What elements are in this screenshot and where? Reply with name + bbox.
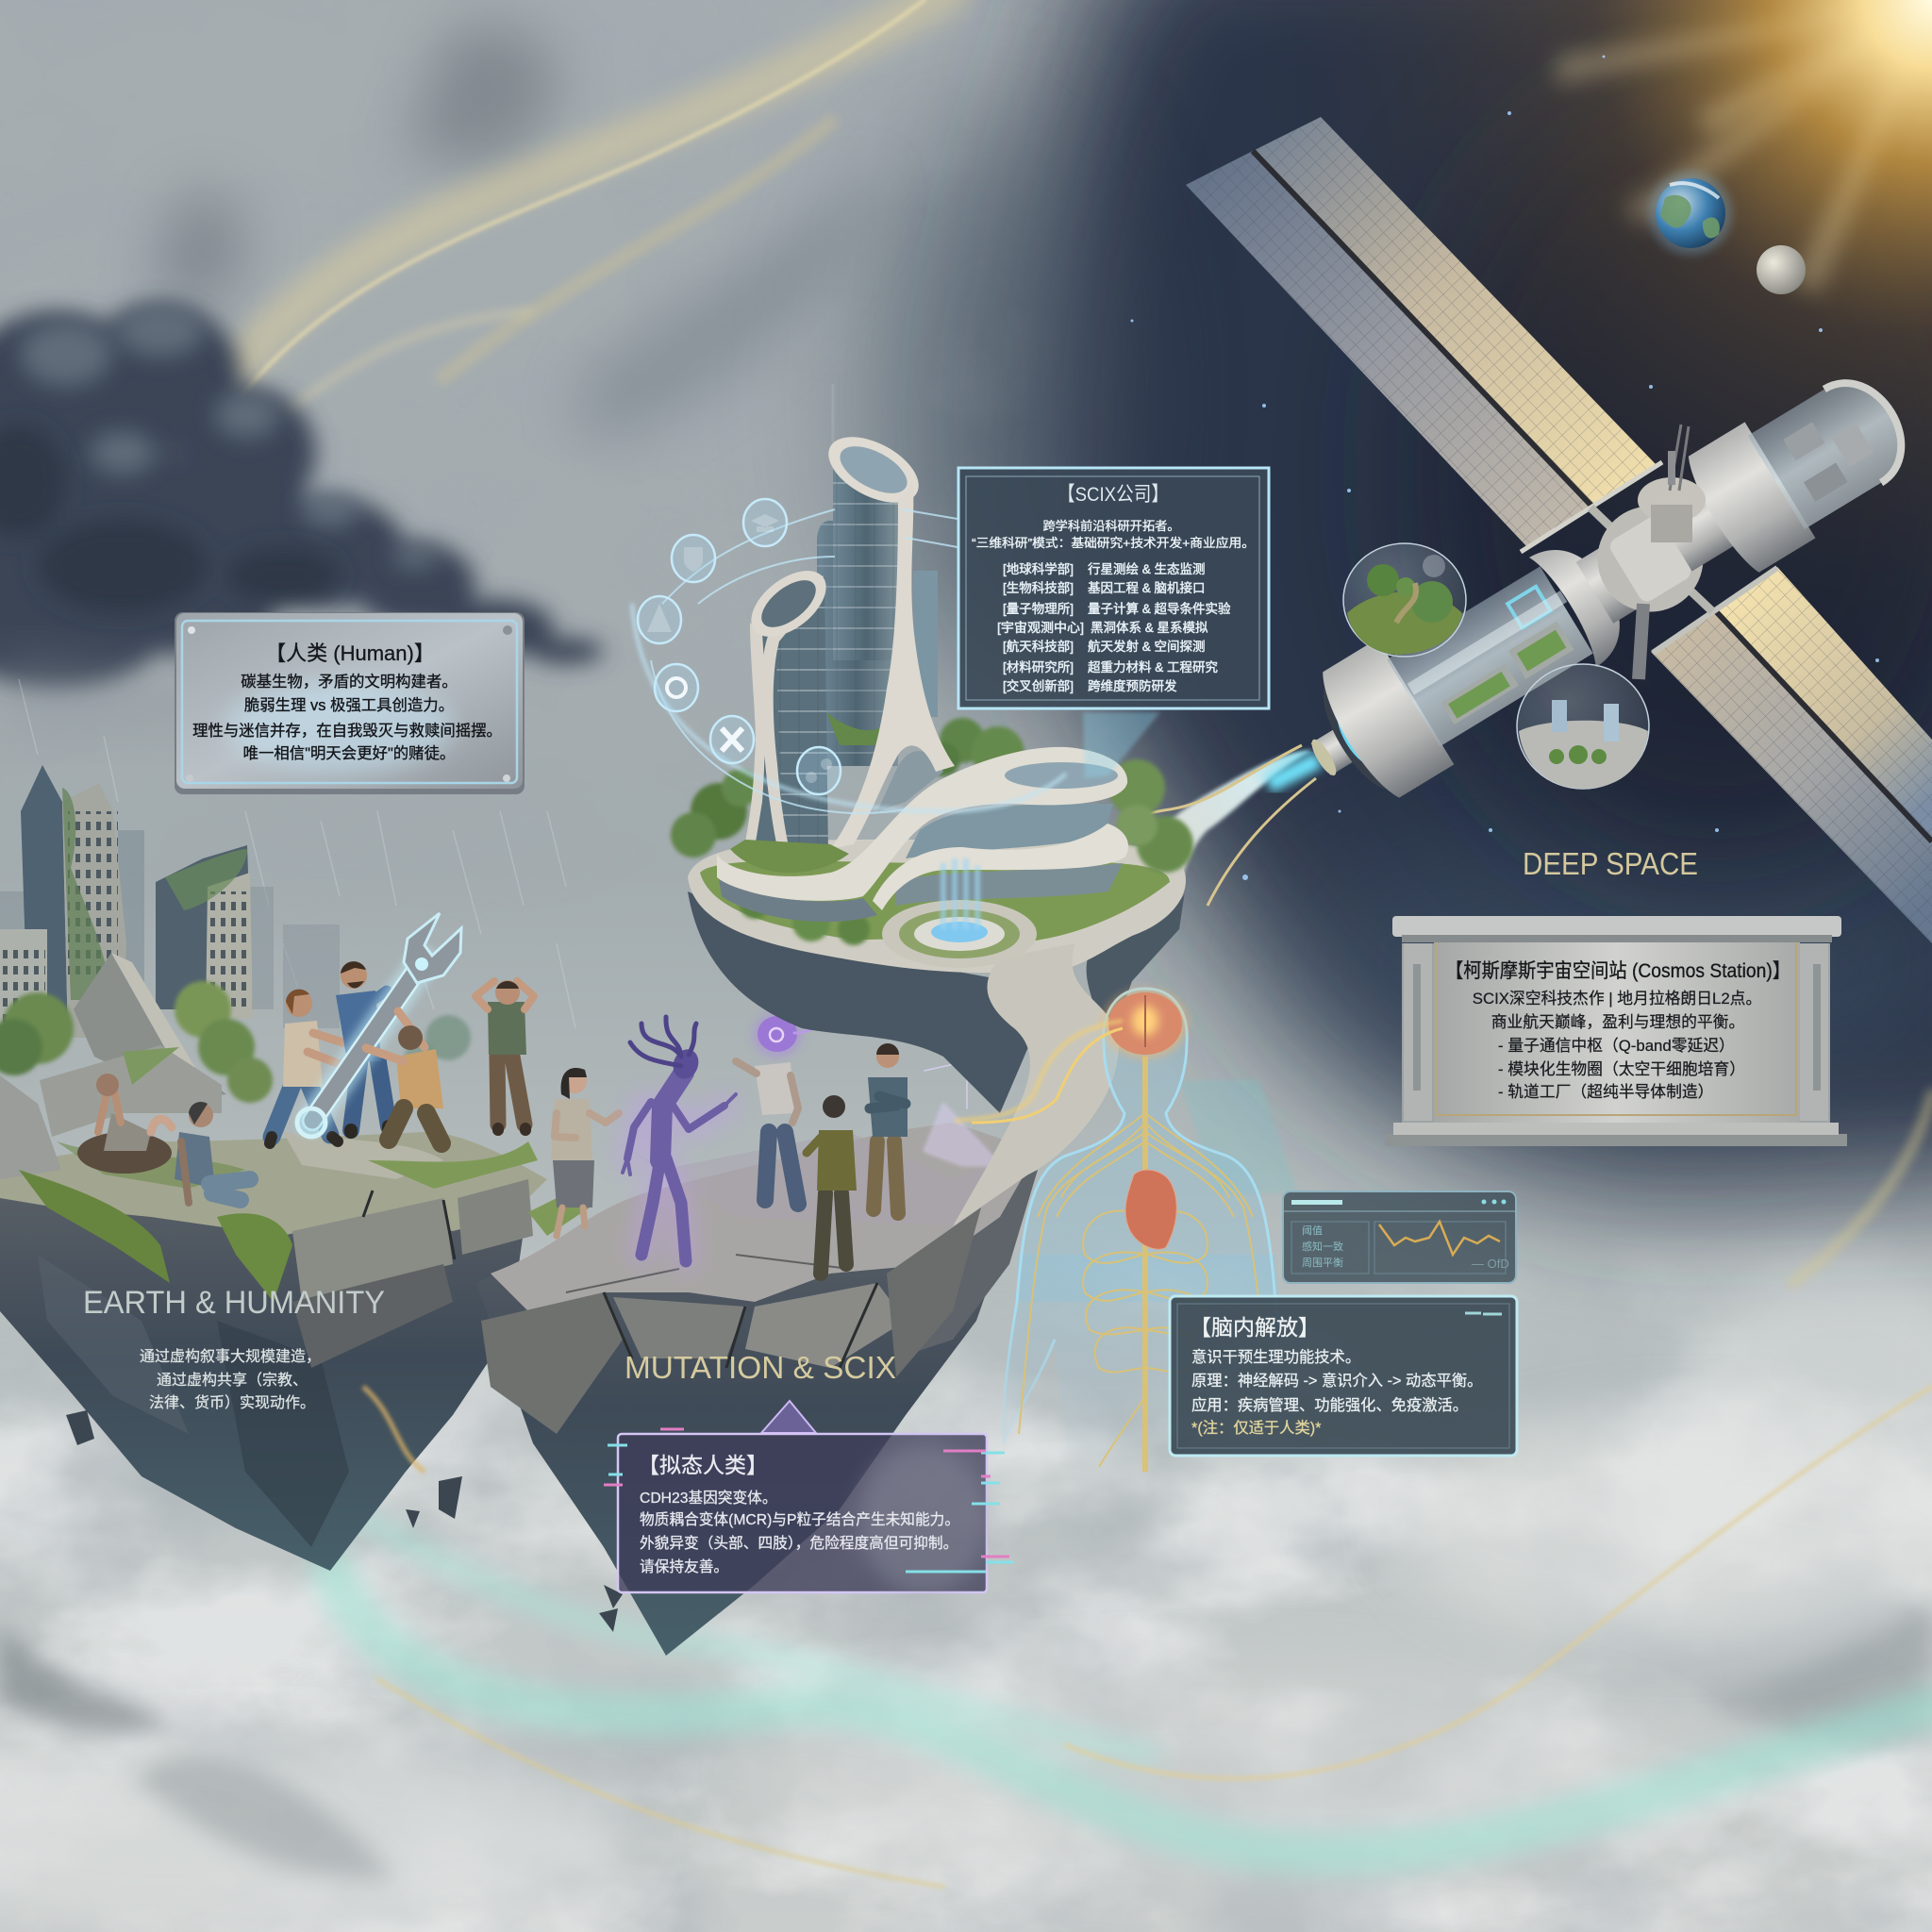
- panel: mimic humans: [604, 1401, 1014, 1594]
- plaque body text: - 量子通信中枢（Q-band零延迟）: [1498, 1037, 1735, 1055]
- panel body text: CDH23基因突变体。: [640, 1490, 777, 1507]
- icon circles: research fields: [638, 499, 841, 794]
- panel intro: 跨学科前沿科研开拓者。: [1042, 518, 1180, 533]
- station: lab dome: [1517, 664, 1649, 789]
- panel title: 【脑内解放】: [1190, 1315, 1320, 1340]
- sun rays: [1557, 0, 1932, 292]
- hologram projection cone: [1083, 712, 1160, 778]
- left tower: [740, 558, 838, 868]
- main tower: [818, 384, 929, 660]
- panel body text: 物质耦合变体(MCR)与P粒子结合产生未知能力。: [640, 1511, 959, 1528]
- floating rock fragments: [66, 1410, 623, 1632]
- glass body lower: [1004, 1255, 1289, 1491]
- plaque body text: - 轨道工厂（超纯半导体制造）: [1498, 1083, 1713, 1101]
- panel intro: [972, 518, 1255, 550]
- plaque body text: 商业航天巅峰，盈利与理想的平衡。: [1491, 1013, 1744, 1031]
- person: man olive sweater: [807, 1095, 857, 1274]
- teal prism backdrop: [1179, 1080, 1298, 1193]
- text: earth & humanity caption: 通过虚构共享（宗教、: [157, 1372, 308, 1389]
- plaque body text: 唯一相信"明天会更好"的赌徒。: [243, 745, 455, 762]
- plaque body text: - 模块化生物圈（太空干细胞培育）: [1498, 1060, 1745, 1078]
- nerves: [1019, 1057, 1272, 1472]
- people: humanity group: [77, 961, 389, 1203]
- division table: [宇宙观测中心]: [997, 621, 1084, 635]
- giant wrench: [297, 913, 461, 1137]
- panel title: 【SCIX公司】: [1058, 483, 1169, 506]
- panel body text: 请保持友善。: [640, 1558, 728, 1575]
- plaza and hologram fountain: [882, 900, 1037, 968]
- people: mutation group: [623, 1008, 1000, 1274]
- vitals labels: [1302, 1224, 1343, 1269]
- station: biosphere dome: [1343, 543, 1466, 657]
- smoke swirls upper left: [0, 0, 1085, 943]
- plaque title: 【柯斯摩斯宇宙空间站 (Cosmos Station)】: [1445, 960, 1790, 982]
- panel: cosmos station plaque: [1385, 916, 1847, 1146]
- division table: 行星测绘 & 生态监测: [1088, 562, 1206, 576]
- plaque body text: 理性与迷信并存，在自我毁灭与救赎间摇摆。: [192, 723, 502, 740]
- person: sitting head in hands: [77, 1074, 172, 1174]
- solar panel: upper wing: [1186, 117, 1662, 557]
- person: man crossed arms: [868, 1043, 908, 1213]
- ruined tower B: [156, 845, 253, 1019]
- division table: 航天发射 & 空间探测: [1088, 640, 1206, 654]
- storm cloud: [0, 304, 604, 729]
- people: kneeling group: [366, 980, 619, 1236]
- panel note: *(注：仅适于人类)*: [1191, 1420, 1322, 1437]
- SCIX headquarters on floating platform: [632, 384, 1193, 1226]
- heading: mutation & scix: MUTATION & SCIX: [625, 1350, 896, 1385]
- panel: brain liberation: [1170, 1296, 1517, 1456]
- station: spine and modules: [1280, 350, 1929, 824]
- heading: earth & humanity: EARTH & HUMANITY: [83, 1285, 385, 1321]
- panel intro: “三维科研”模式：基础研究+技术开发+商业应用。: [972, 536, 1255, 550]
- brain: [1104, 990, 1187, 1058]
- tower hedge: [826, 712, 882, 745]
- vitals labels: 周围平衡: [1302, 1257, 1343, 1269]
- person: man with purple head: [736, 1008, 825, 1204]
- plaque body text: SCIX深空科技杰作 | 地月拉格朗日L2点。: [1473, 990, 1761, 1008]
- neural human figure: [948, 989, 1298, 1491]
- person: suspenders: [270, 990, 345, 1143]
- space station: [1280, 350, 1929, 824]
- icon: atom cluster: [655, 664, 698, 711]
- icon: rocket: [638, 596, 681, 643]
- person: kneeling: [366, 1011, 443, 1143]
- division table: 超重力材料 & 工程研究: [1088, 660, 1218, 675]
- ruined block: [0, 929, 47, 1033]
- collapsed slab: [40, 953, 226, 1137]
- gold streak on island: [363, 1387, 425, 1472]
- person: purple mimic: [623, 1017, 736, 1261]
- orbit lines around tower: [632, 509, 1066, 813]
- beam: station to SCIX building: [1127, 745, 1319, 934]
- back tower right: [913, 571, 938, 717]
- plaque body text: [1473, 990, 1761, 1101]
- vitals labels: 感知一致: [1302, 1240, 1343, 1253]
- panel: human plaque: [175, 612, 525, 794]
- stars: [1130, 55, 1879, 880]
- person: blue coverall: [336, 961, 389, 1132]
- hologram fountain beam: [943, 858, 977, 929]
- panel body text: [1191, 1348, 1482, 1414]
- hologram door: [924, 1057, 1000, 1165]
- icon: shield: [672, 535, 715, 582]
- text: earth & humanity caption: 通过虚构叙事大规模建造，: [140, 1348, 321, 1365]
- icon: dna cross: [710, 716, 754, 763]
- lower building: [717, 747, 1128, 922]
- panel body text: 应用：疾病管理、功能强化、免疫激活。: [1191, 1396, 1468, 1414]
- gold energy swoosh upper left: [212, 0, 948, 415]
- white swoosh arch: [830, 483, 955, 849]
- text: earth & humanity caption: [140, 1348, 321, 1411]
- division table: [997, 562, 1231, 693]
- division table: [材料研究所]: [1003, 660, 1074, 675]
- signal beam to hologram: [948, 1021, 1123, 1123]
- vitals waveform: [1379, 1222, 1500, 1255]
- panel body text: 意识干预生理功能技术。: [1191, 1348, 1360, 1366]
- division table: 黑洞体系 & 星系模拟: [1091, 621, 1208, 635]
- heading: deep space: DEEP SPACE: [1523, 846, 1698, 881]
- panel: scix company: [958, 468, 1269, 708]
- panel title: 【拟态人类】: [638, 1453, 768, 1477]
- division table: 跨维度预防研发: [1088, 679, 1177, 693]
- division table: [地球科学部]: [1003, 562, 1074, 576]
- icon: earth: [1649, 172, 1732, 255]
- plaque body text: 脆弱生理 vs 极强工具创造力。: [244, 697, 454, 714]
- platform deck: [688, 840, 1186, 974]
- vitals labels: 阈值: [1302, 1224, 1323, 1237]
- floating island: mutation & scix: [476, 1123, 1038, 1656]
- trees: [671, 718, 1193, 945]
- road: [953, 943, 1119, 1226]
- lawn around tower base: [730, 840, 849, 873]
- vitals readout: — OfD: [1472, 1257, 1509, 1271]
- plaque body text: 碳基生物，矛盾的文明构建者。: [241, 674, 458, 691]
- platform rock: [688, 891, 1028, 1113]
- rain: [19, 679, 575, 1028]
- division table: [航天科技部]: [1003, 640, 1074, 654]
- lower mist and clouds: [0, 1226, 1932, 1932]
- icon: helix: [797, 747, 841, 794]
- plaque title: 【人类 (Human)】: [265, 641, 435, 665]
- icon: moon: [1757, 245, 1806, 294]
- smoke wisps: [151, 25, 877, 441]
- panel body text: 原理：神经解码 -> 意识介入 -> 动态平衡。: [1191, 1372, 1482, 1390]
- person: hands on head: [475, 980, 534, 1130]
- bushes: [0, 981, 471, 1103]
- division table: [交叉创新部]: [1003, 678, 1074, 693]
- station: antenna hub: [1638, 425, 1706, 679]
- panel body text: [640, 1490, 959, 1575]
- solar panel: lower wing: [1651, 567, 1932, 943]
- panel body text: 外貌异变（头部、四肢），危险程度高但可抑制。: [640, 1535, 958, 1552]
- person: sitting boy: [175, 1102, 250, 1203]
- glass body outline: [1004, 989, 1289, 1443]
- glass body upper: [1017, 989, 1275, 1302]
- icon: graduation cap: [743, 499, 787, 546]
- division table: [生物科技部]: [1003, 581, 1074, 595]
- back tower: [817, 521, 898, 766]
- person: woman: [551, 1068, 619, 1236]
- heart: [1125, 1170, 1176, 1249]
- floating island: earth & humanity: [0, 1075, 547, 1571]
- teal and gold energy waves: [283, 1094, 1932, 1887]
- platform lawn: [700, 860, 1170, 943]
- platform rear rock: [1087, 891, 1185, 1047]
- panel: vitals monitor: [1283, 1191, 1516, 1283]
- text: earth & humanity caption: 法律、货币）实现动作。: [149, 1394, 315, 1411]
- ruined tower A: [21, 765, 126, 1038]
- division table: [量子物理所]: [1003, 602, 1074, 616]
- plaque body text: [192, 674, 502, 762]
- division table: 基因工程 & 脑机接口: [1088, 580, 1206, 595]
- division table: 量子计算 & 超导条件实验: [1088, 601, 1231, 616]
- ruined city: [0, 765, 471, 1137]
